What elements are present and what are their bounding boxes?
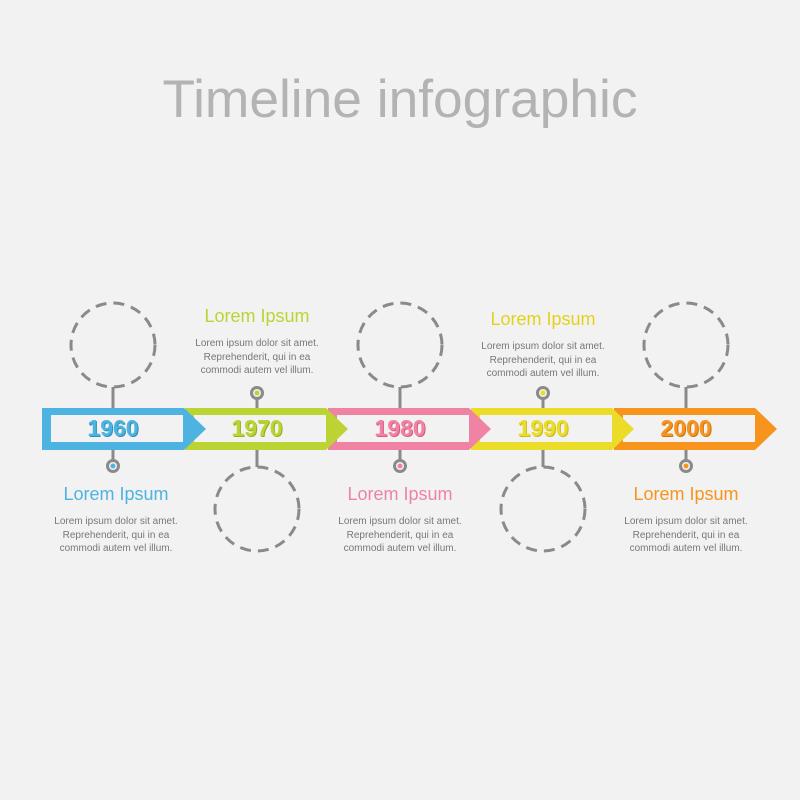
year labels: 1980 (375, 416, 427, 442)
text block 1980: commodi autem vel illum. (344, 543, 456, 554)
text block 2000: Lorem Ipsum (633, 484, 739, 504)
text block 1970 (195, 306, 319, 376)
arrow: 2000 segment (614, 408, 777, 450)
text block 1990 (481, 309, 605, 379)
text block 2000: commodi autem vel illum. (630, 543, 742, 554)
year labels: 1990 (518, 416, 570, 442)
arrow: 1960 segment (42, 408, 206, 450)
connectors and dashed circles (71, 303, 728, 551)
year labels (87, 415, 713, 442)
text block 1990: Lorem ipsum dolor sit amet. (481, 341, 605, 352)
year labels: 1970 (232, 416, 284, 442)
text block 1980: Reprehenderit, qui in ea (347, 530, 454, 541)
arrow: 1980 segment (328, 408, 491, 450)
text block 1980 (338, 484, 462, 554)
marker 1990 (538, 388, 548, 408)
year labels: 1960 (87, 415, 139, 441)
circle 1960 top (71, 303, 155, 408)
text block 1990: Reprehenderit, qui in ea (490, 355, 597, 366)
text block 1960: commodi autem vel illum. (60, 543, 172, 554)
year labels: 1990 (517, 415, 569, 441)
circle 2000 top (644, 303, 728, 408)
text block 1980: Lorem ipsum dolor sit amet. (338, 516, 462, 527)
marker 2000 (680, 450, 692, 472)
text block 2000 (624, 484, 748, 554)
circle 1990 bottom (501, 450, 585, 551)
arrow: 1970 segment (185, 408, 348, 450)
year labels: 1970 (231, 415, 283, 441)
markers (108, 388, 692, 472)
year labels: 2000 (660, 415, 712, 441)
text block 1990: commodi autem vel illum. (487, 368, 599, 379)
arrow: 1990 segment (471, 408, 634, 450)
year labels: 1980 (374, 415, 426, 441)
marker 1960 (108, 450, 118, 472)
text block 2000: Lorem ipsum dolor sit amet. (624, 516, 748, 527)
text block 2000: Reprehenderit, qui in ea (633, 530, 740, 541)
text block 1980: Lorem Ipsum (347, 484, 453, 504)
year labels: 2000 (661, 416, 713, 442)
marker 1970 (252, 388, 262, 408)
title: Timeline infographic (162, 70, 638, 129)
text block 1990: Lorem Ipsum (490, 309, 596, 329)
text block 1970: Lorem ipsum dolor sit amet. (195, 338, 319, 349)
text block 1960 (54, 484, 178, 554)
circle 1980 top (358, 303, 442, 408)
text block 1970: Reprehenderit, qui in ea (204, 352, 311, 363)
text block 1960: Lorem Ipsum (63, 484, 169, 504)
marker 1980 (394, 450, 406, 472)
text block 1970: commodi autem vel illum. (201, 365, 313, 376)
year labels: 1960 (88, 416, 140, 442)
text block 1970: Lorem Ipsum (204, 306, 310, 326)
text block 1960: Reprehenderit, qui in ea (63, 530, 170, 541)
circle 1970 bottom (215, 450, 299, 551)
text block 1960: Lorem ipsum dolor sit amet. (54, 516, 178, 527)
